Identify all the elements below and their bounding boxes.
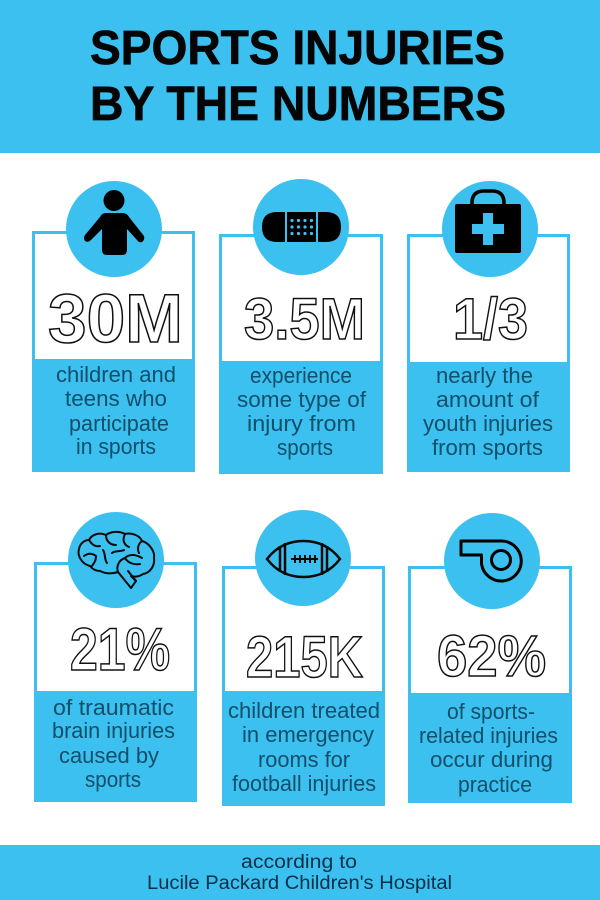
title banner <box>0 0 600 153</box>
text: children and teens: children and <box>56 362 176 387</box>
icon: medical kit <box>455 191 521 253</box>
icon: person <box>84 190 144 255</box>
text: traumatic brain injuries: caused by <box>59 743 159 768</box>
text: experience injury <box>237 363 367 460</box>
text: youth injuries: from sports <box>432 435 543 460</box>
icon: bandage <box>262 212 341 242</box>
text: youth injuries: amount of <box>436 387 540 412</box>
text: during practice: of sports- <box>447 699 535 724</box>
title: SPORTS INJURIES <box>90 22 505 75</box>
source text: according to <box>241 852 357 873</box>
text: youth injuries <box>423 363 553 460</box>
text: children and teens: teens who <box>65 386 167 411</box>
text: children and teens <box>56 362 176 459</box>
panel: 62% during practice <box>408 513 572 803</box>
text: traumatic brain injuries: brain injuries <box>52 718 175 743</box>
text: experience injury: experience <box>250 363 352 388</box>
stat: 62%: 62% <box>437 624 546 689</box>
panel: 1/3 of youth injuries <box>407 181 570 472</box>
text: children and teens: participate <box>69 411 169 436</box>
text: youth injuries: nearly the <box>436 363 533 388</box>
stat: 215K: 215K <box>246 625 363 690</box>
text: during practice: occur during <box>430 747 553 772</box>
text: emergency rooms: rooms for <box>258 747 350 772</box>
stat: 3.5M: 3.5M <box>244 287 365 352</box>
text: emergency rooms <box>228 698 380 796</box>
source text <box>147 852 452 894</box>
panel: 30M children <box>32 181 195 472</box>
panel: 21% brain injuries <box>34 512 197 802</box>
text: emergency rooms: football injuries <box>232 771 376 796</box>
icon: brain <box>79 532 154 588</box>
text: traumatic brain injuries <box>52 695 175 792</box>
text: experience injury: injury from <box>247 411 356 436</box>
text: traumatic brain injuries: sports <box>85 767 141 792</box>
text: emergency rooms: in emergency <box>242 722 374 747</box>
stat: 21%: 21% <box>70 616 170 683</box>
source text: Lucile Packard Children's Hospital <box>147 873 452 894</box>
panel: 215K football injuries <box>222 510 385 806</box>
icon: whistle <box>461 541 521 581</box>
text: during practice <box>419 699 558 797</box>
text: traumatic brain injuries: of traumatic <box>53 695 174 720</box>
stat: 30M: 30M <box>48 280 183 357</box>
title: BY THE NUMBERS <box>90 78 506 131</box>
text: experience injury: some type of <box>237 387 367 412</box>
stat: 1/3: 1/3 <box>453 287 528 352</box>
text: children and teens: in sports <box>76 434 156 459</box>
icon: football <box>267 541 340 577</box>
panel: 3.5M injured <box>219 179 383 474</box>
text: emergency rooms: children treated <box>228 698 380 723</box>
text: during practice: practice <box>458 772 532 797</box>
text: youth injuries: youth injuries <box>423 411 553 436</box>
title <box>90 22 506 131</box>
text: experience injury: sports <box>277 435 333 460</box>
footer: source <box>0 845 600 900</box>
text: during practice: related injuries <box>419 723 558 748</box>
